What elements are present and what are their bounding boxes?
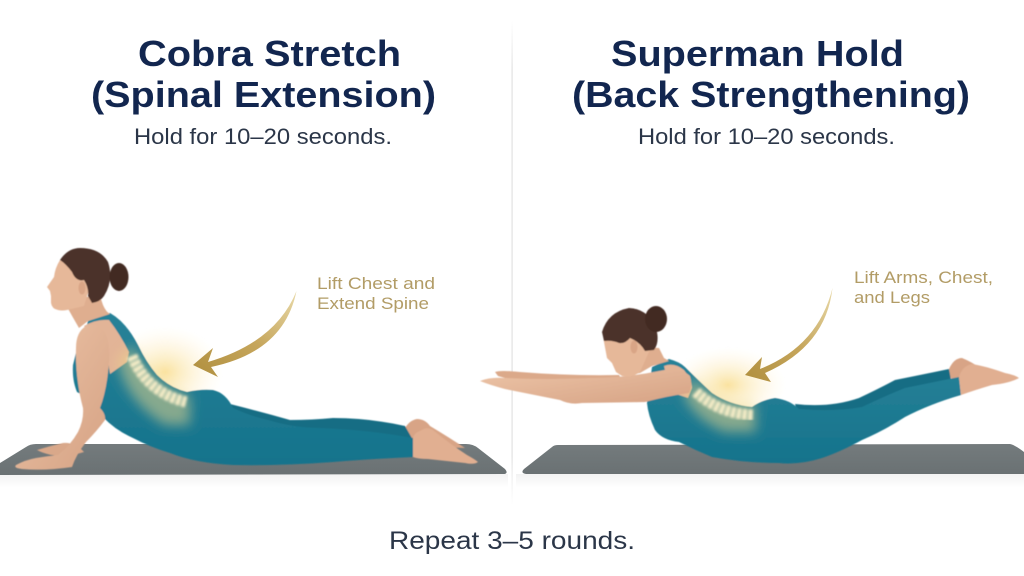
superman title bbox=[572, 33, 970, 115]
superman near foot bbox=[959, 364, 1019, 395]
superman head bbox=[602, 306, 667, 376]
cobra spine highlight bbox=[118, 345, 190, 425]
superman figure bbox=[480, 306, 1019, 463]
cobra callout label: Extend Spine bbox=[317, 295, 429, 313]
superman title: (Back Strengthening) bbox=[572, 74, 970, 115]
cobra far foot bbox=[405, 419, 465, 448]
cobra head bbox=[47, 248, 128, 310]
cobra arrow bbox=[193, 291, 296, 377]
superman back glow bbox=[670, 347, 786, 423]
divider between exercises bbox=[512, 20, 513, 505]
superman back skin bbox=[664, 365, 692, 398]
superman callout label: Lift Arms, Chest, bbox=[854, 269, 993, 287]
superman callout label: and Legs bbox=[854, 289, 930, 307]
superman spine highlight bbox=[684, 378, 756, 432]
superman neck bbox=[622, 346, 669, 376]
cobra title: Cobra Stretch bbox=[138, 33, 401, 74]
cobra callout label: Lift Chest and bbox=[317, 275, 435, 293]
cobra bodysuit bbox=[73, 313, 413, 465]
superman bodysuit bbox=[647, 359, 961, 463]
superman far leg bbox=[795, 369, 951, 420]
cobra shoulder and arm bbox=[15, 325, 109, 470]
superman far arm bbox=[495, 371, 625, 385]
superman hold time: Hold for 10–20 seconds. bbox=[638, 124, 895, 149]
cobra figure bbox=[15, 248, 478, 470]
superman arrow bbox=[745, 288, 832, 382]
panel: cobra stretch bbox=[0, 33, 508, 488]
cobra title: (Spinal Extension) bbox=[91, 74, 436, 115]
cobra hold time: Hold for 10–20 seconds. bbox=[134, 124, 392, 149]
panel: superman hold bbox=[480, 33, 1024, 488]
footer: repeat instruction: Repeat 3–5 rounds. bbox=[389, 527, 635, 555]
superman title: Superman Hold bbox=[611, 33, 904, 74]
far hand bbox=[37, 443, 84, 456]
superman callout label bbox=[854, 269, 993, 307]
cobra back glow bbox=[107, 326, 223, 418]
superman far foot bbox=[949, 358, 1000, 380]
cobra far leg bbox=[230, 404, 413, 440]
superman near arm bbox=[480, 369, 691, 404]
cobra title bbox=[91, 33, 436, 115]
cobra back skin bbox=[84, 320, 129, 374]
cobra mat bbox=[0, 444, 508, 488]
cobra near foot bbox=[413, 428, 478, 464]
cobra callout label bbox=[317, 275, 435, 313]
superman mat bbox=[516, 444, 1024, 488]
cobra neck bbox=[66, 296, 110, 328]
